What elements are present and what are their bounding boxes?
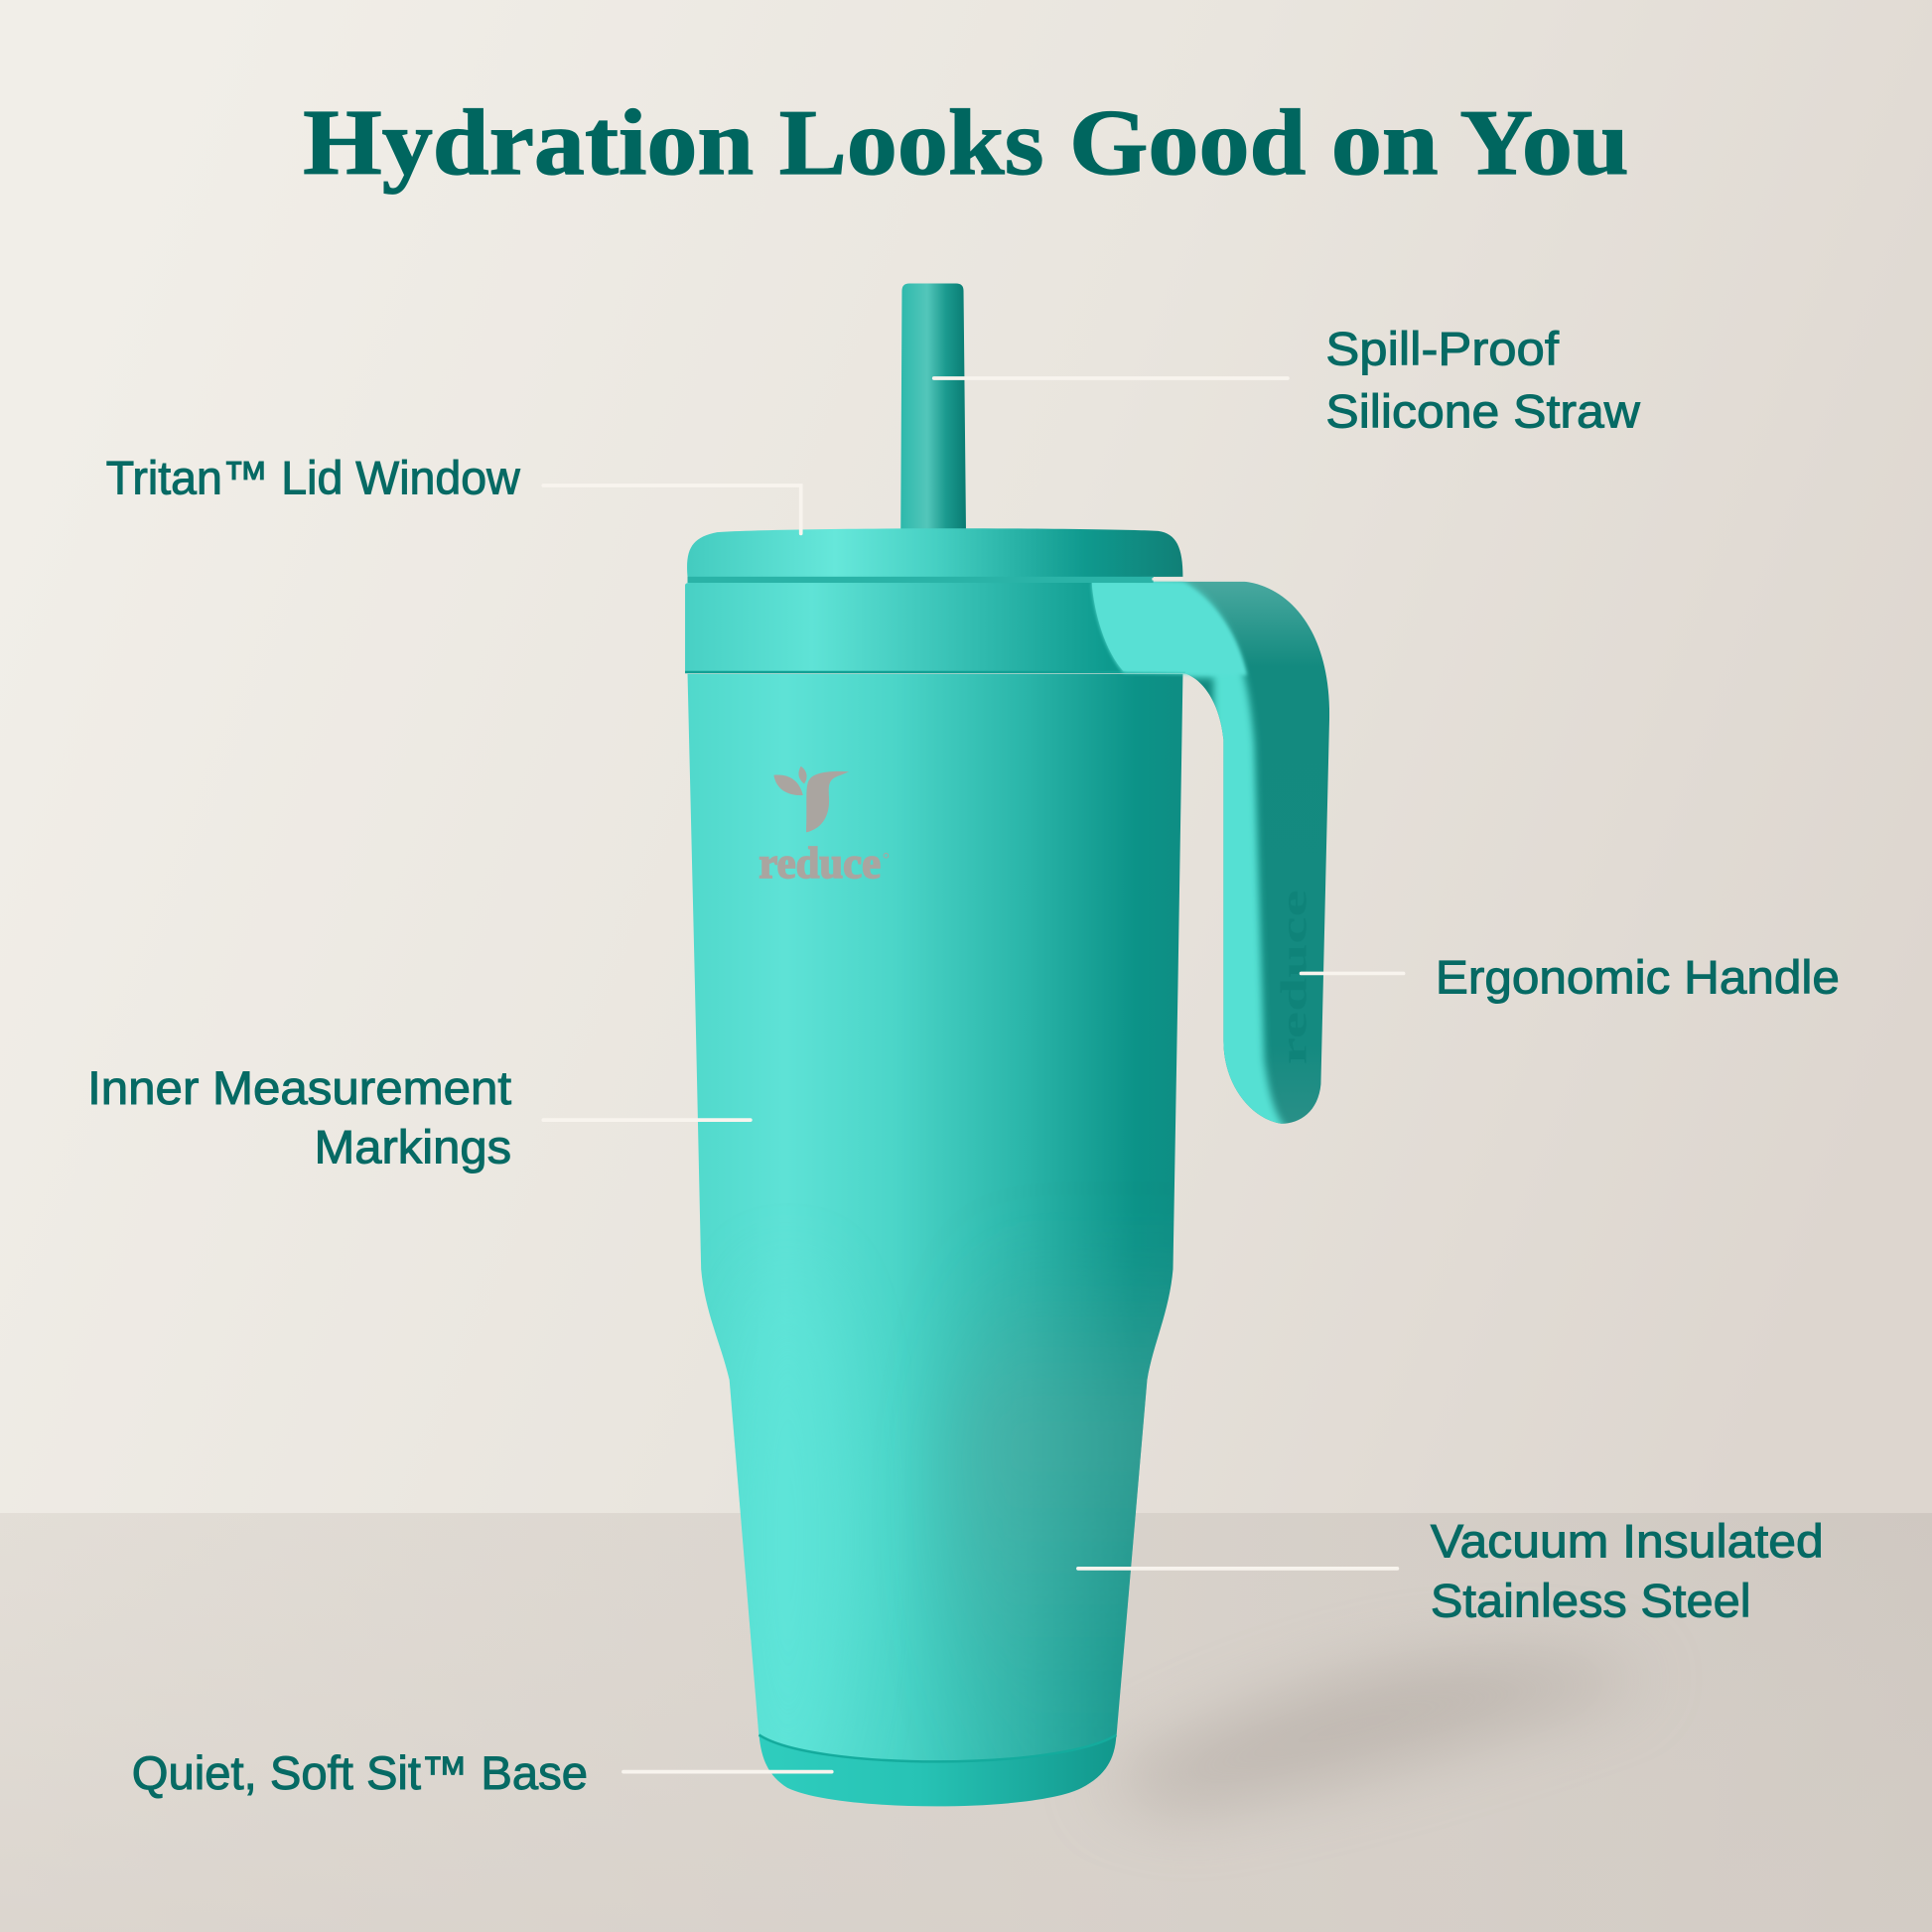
title: Hydration Looks Good on You — [303, 91, 1629, 195]
background wall — [0, 0, 1932, 1516]
base — [759, 1734, 1116, 1806]
table surface — [0, 1513, 1932, 1932]
logo — [759, 766, 889, 888]
callout: insulation — [1078, 1515, 1824, 1626]
callout: straw: Silicone Straw — [1325, 385, 1641, 438]
collar back — [685, 583, 1182, 671]
handle — [1084, 573, 1337, 1131]
callout: straw — [934, 322, 1641, 438]
straw — [900, 283, 966, 531]
callout: insulation: Stainless Steel — [1431, 1574, 1751, 1626]
handle embossed wordmark: reduce — [1275, 890, 1315, 1064]
cast shadow — [1097, 1658, 1651, 1811]
tumbler body — [687, 673, 1183, 1761]
handle front joint — [1092, 583, 1247, 675]
callout: measurement markings: Inner Measurement — [87, 1061, 511, 1114]
callout: measurement markings: Markings — [314, 1121, 511, 1173]
callout: measurement markings — [87, 1061, 751, 1173]
callout: handle: Ergonomic Handle — [1436, 950, 1840, 1003]
tumbler — [685, 283, 1337, 1885]
callout: lid window: Tritan™ Lid Window — [106, 452, 521, 504]
callout: lid window — [106, 452, 801, 533]
callout: insulation: Vacuum Insulated — [1431, 1515, 1824, 1568]
lid — [687, 528, 1182, 583]
logo wordmark: reduce — [759, 839, 881, 888]
callout: straw: Spill-Proof — [1325, 322, 1560, 374]
callout: base: Quiet, Soft Sit™ Base — [132, 1746, 588, 1799]
